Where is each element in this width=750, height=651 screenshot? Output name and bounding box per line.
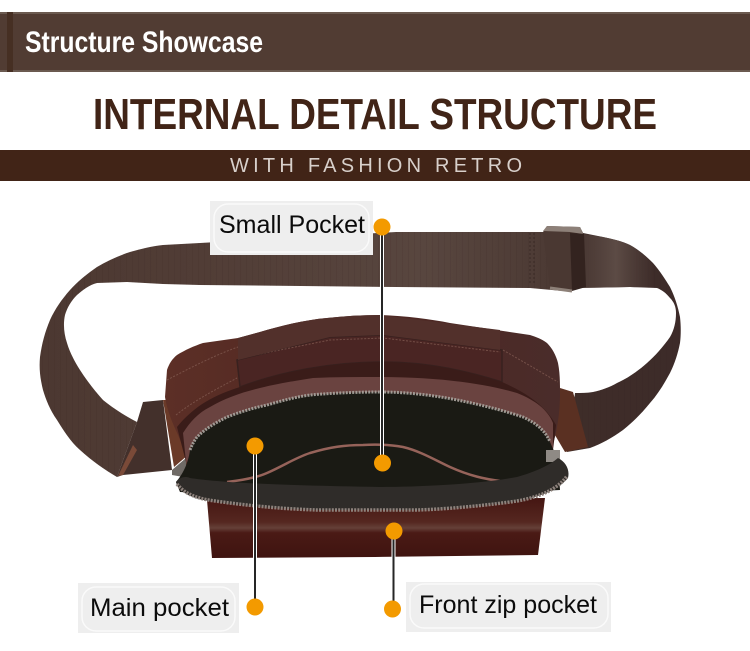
shoulder strap — [40, 226, 681, 477]
label: Main pocket — [78, 583, 239, 633]
label: Main pocket: Main pocket — [90, 594, 229, 622]
header bar: Structure Showcase: Structure Showcase — [25, 26, 263, 59]
title: INTERNAL DETAIL STRUCTURE — [93, 90, 657, 139]
header bar: Structure Showcase — [0, 12, 750, 72]
bag back body — [165, 315, 560, 465]
grab handle patch — [237, 335, 502, 387]
front pocket panel — [207, 498, 545, 558]
interior lining — [176, 392, 560, 500]
label: Small Pocket — [210, 201, 373, 255]
product photo: leather bag with strap — [40, 226, 681, 558]
lower zipper lip — [176, 458, 569, 510]
subtitle band — [0, 150, 750, 181]
callout line: front zip pocket — [392, 531, 396, 609]
label: Front zip pocket: Front zip pocket — [419, 591, 597, 619]
label: Small Pocket: Small Pocket — [219, 211, 365, 239]
strap tab left — [117, 400, 189, 478]
marker dots — [246, 218, 402, 618]
strap tab right — [552, 388, 588, 452]
small pocket edge — [227, 445, 500, 482]
callout line: small pocket — [380, 227, 384, 463]
zipper puller hardware — [546, 450, 560, 462]
label: Front zip pocket — [406, 582, 611, 632]
zipper tape — [183, 377, 553, 462]
callout line: main pocket — [253, 446, 257, 607]
subtitle band: WITH FASHION RETRO — [230, 155, 522, 177]
